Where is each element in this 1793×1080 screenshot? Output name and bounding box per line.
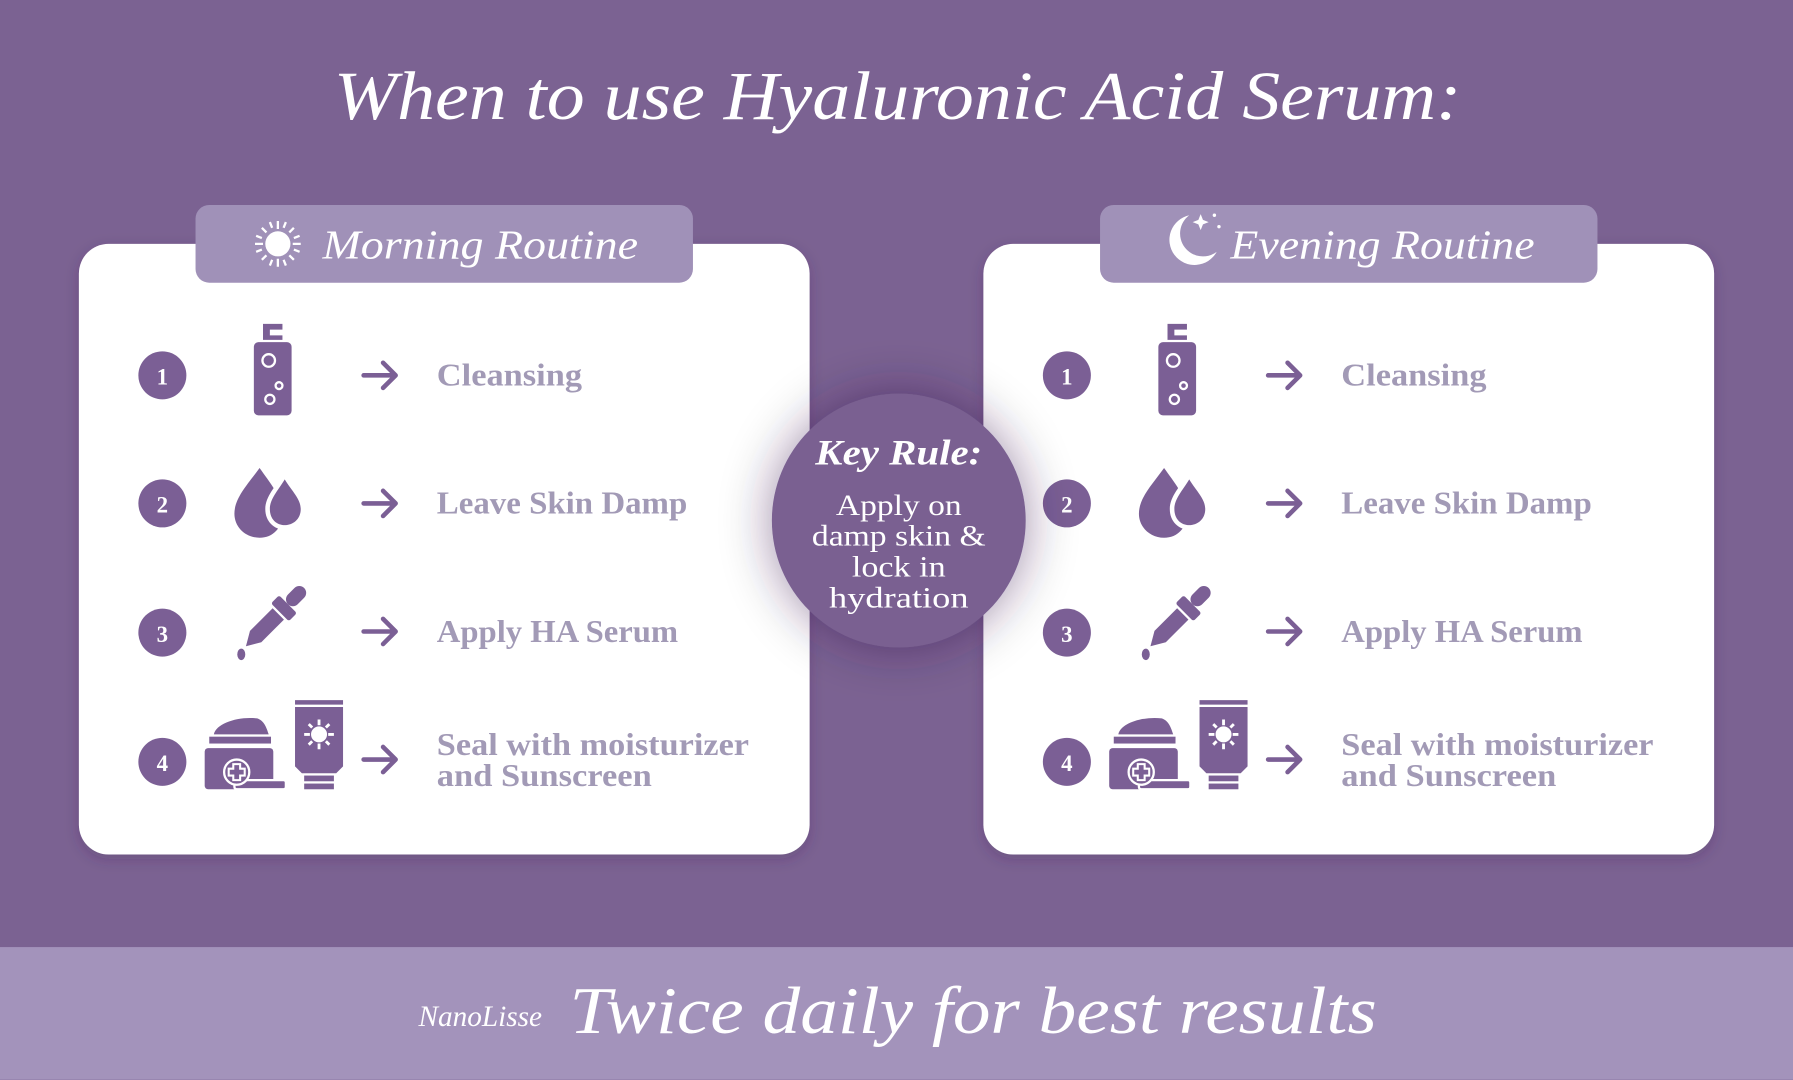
logo: NanoLisse (418, 1001, 542, 1033)
footer tagline: Twice daily for best results (569, 975, 1377, 1048)
step 4: seal: and Sunscreen (1341, 757, 1557, 793)
step 2: leave skin damp (138, 468, 687, 538)
callout: key rule circle: hydration (829, 582, 969, 614)
tab: evening heading: Evening Routine (1229, 222, 1535, 268)
callout: key rule circle: Apply on (836, 490, 962, 522)
step 4: seal: Seal with moisturizer (437, 726, 749, 762)
step 3: apply HA serum: 3 (157, 622, 168, 647)
step 3: apply HA serum (138, 579, 678, 660)
step 1: cleansing: 1 (1061, 364, 1073, 389)
tab: evening heading (1100, 205, 1597, 283)
step 1: cleansing (1043, 324, 1487, 415)
step 1: cleansing: 1 (157, 364, 168, 389)
step 3: apply HA serum: Apply HA Serum (437, 613, 678, 649)
panel: evening routine (983, 205, 1714, 854)
step 4: seal: and Sunscreen (437, 757, 652, 793)
step 2: leave skin damp: 2 (157, 493, 168, 518)
title: When to use Hyaluronic Acid Serum: (334, 58, 1461, 134)
step 3: apply HA serum (1043, 579, 1583, 660)
step 4: seal: 4 (157, 751, 168, 776)
callout: key rule circle: Key Rule: (814, 433, 982, 473)
step 2: leave skin damp: 2 (1061, 493, 1073, 518)
step 4: seal (138, 700, 749, 793)
step 4: seal (1043, 700, 1653, 793)
step 2: leave skin damp: Leave Skin Damp (437, 485, 687, 521)
step 4: seal: 4 (1061, 751, 1073, 776)
panel: morning routine (79, 205, 810, 854)
step 2: leave skin damp (1043, 468, 1592, 538)
step 3: apply HA serum: Apply HA Serum (1341, 613, 1583, 649)
step 2: leave skin damp: Leave Skin Damp (1341, 485, 1592, 521)
icon: moon (1169, 214, 1221, 265)
tab: morning heading: Morning Routine (321, 222, 638, 268)
footer band (0, 947, 1793, 1080)
step 1: cleansing: Cleansing (437, 357, 582, 393)
tab: morning heading (196, 205, 693, 283)
step 1: cleansing (138, 324, 582, 415)
callout: key rule circle (772, 394, 1026, 647)
callout: key rule circle: lock in (852, 552, 946, 584)
step 4: seal: Seal with moisturizer (1341, 726, 1653, 762)
icon: sun (255, 221, 301, 267)
callout: key rule circle: damp skin & (812, 521, 986, 553)
step 3: apply HA serum: 3 (1061, 622, 1073, 647)
step 1: cleansing: Cleansing (1341, 357, 1487, 393)
